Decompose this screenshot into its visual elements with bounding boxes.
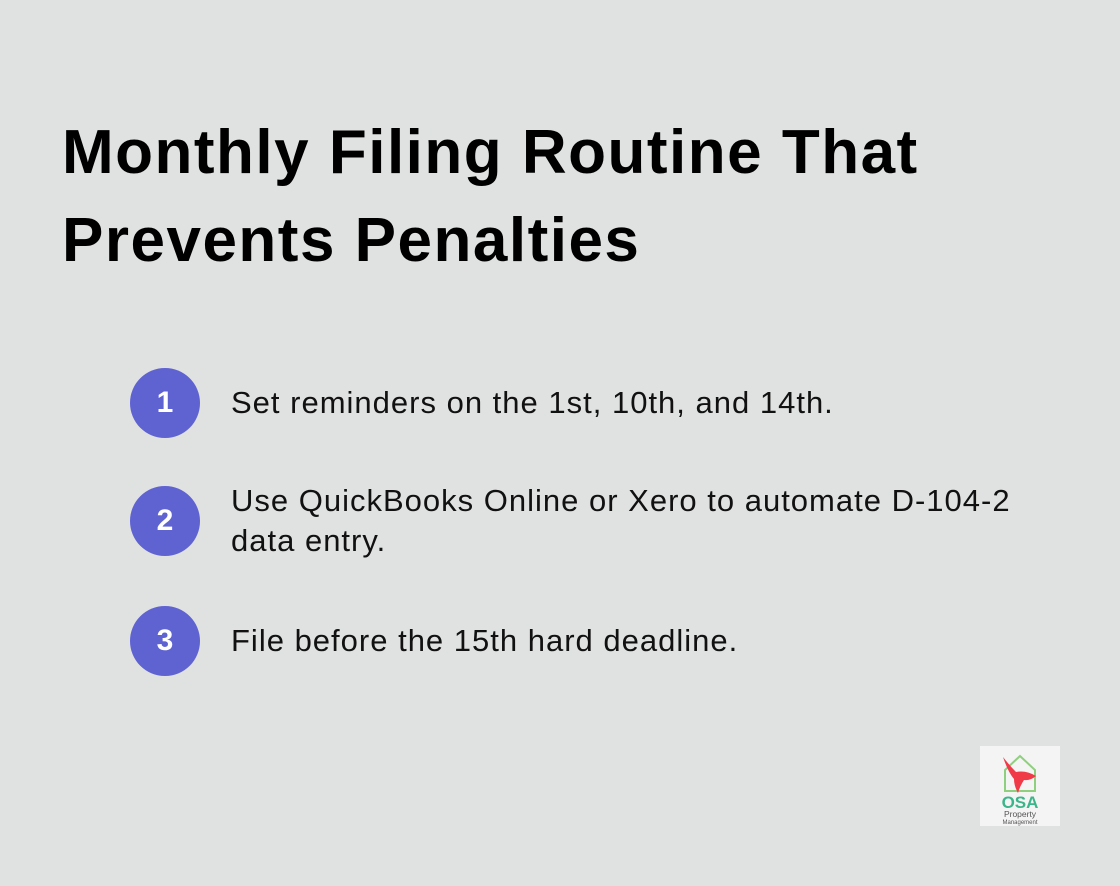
title: Prevents Penalties xyxy=(62,206,640,275)
icon: number 1: 1 xyxy=(157,386,173,419)
title: Monthly Filing Routine That xyxy=(62,118,919,187)
icon: number 1 xyxy=(130,368,200,438)
text: step 2: Use QuickBooks Online or Xero to automate D-104-2 xyxy=(231,483,1011,518)
text: step 1: Set reminders on the 1st, 10th, and 14th. xyxy=(231,385,834,420)
icon: number 2: 2 xyxy=(157,504,173,537)
title xyxy=(62,118,919,275)
step 3 xyxy=(130,606,738,676)
step 2 xyxy=(130,483,1011,558)
step 1 xyxy=(130,368,834,438)
text: step 2 xyxy=(231,483,1011,558)
text: step 2: data entry. xyxy=(231,523,386,558)
icon: number 3 xyxy=(130,606,200,676)
logo: Property xyxy=(1004,809,1037,819)
icon: number 3: 3 xyxy=(157,624,173,657)
logo: Management xyxy=(1002,820,1038,826)
logo xyxy=(980,746,1060,826)
icon: number 2 xyxy=(130,486,200,556)
text: step 3: File before the 15th hard deadline. xyxy=(231,623,738,658)
logo: OSA xyxy=(1002,793,1038,812)
